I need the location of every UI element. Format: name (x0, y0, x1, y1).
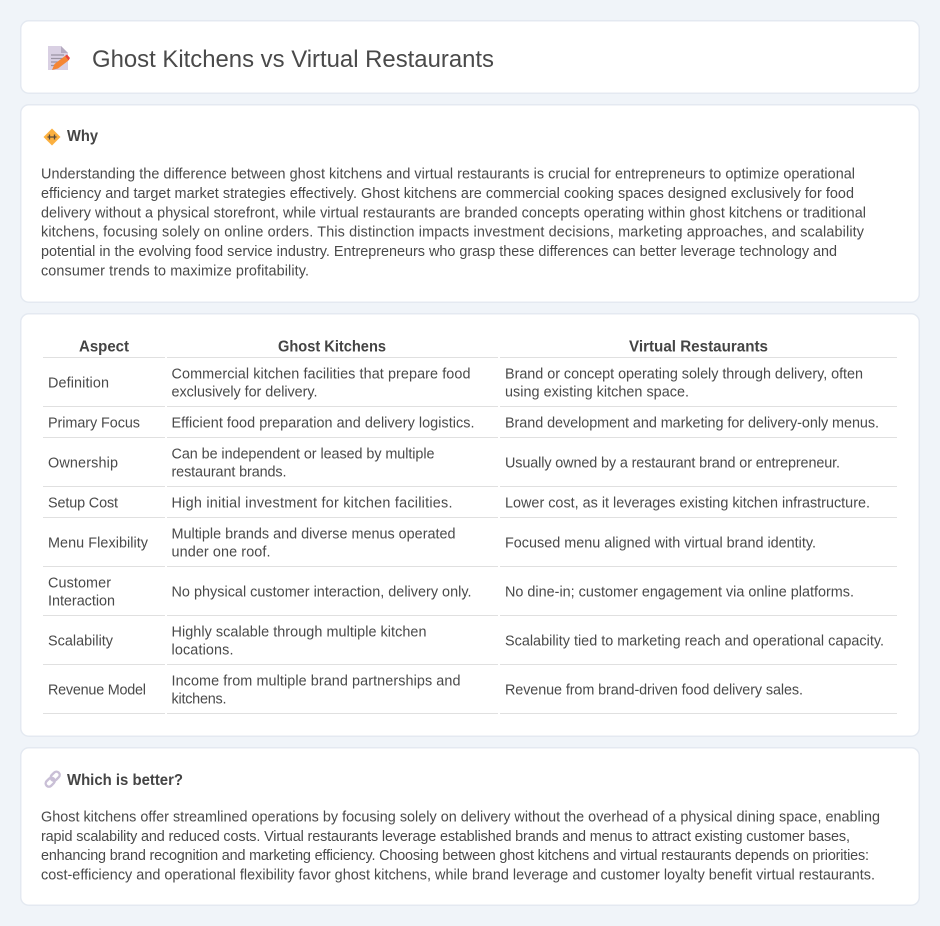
why paragraph: potential in the evolving food service industry. Entrepreneurs who grasp these differences can better leverage technology and (41, 244, 837, 260)
row: definition: Brand or concept operating solely through delivery, often (505, 366, 863, 382)
row: scalability: locations. (172, 642, 234, 658)
row: definition: using existing kitchen space. (505, 384, 689, 400)
why paragraph: consumer trends to maximize profitability. (41, 264, 309, 280)
conclusion paragraph: enhancing brand recognition and marketing efficiency. Choosing between ghost kitchens and virtual restaurants depends on priorities: (41, 848, 869, 864)
row: menu flexibility: under one roof. (172, 544, 270, 560)
row: customer interaction: Customer (48, 576, 111, 592)
heading: which is better: Which is better? (67, 772, 183, 789)
icon: document with pencil (48, 46, 70, 70)
row: revenue model (48, 674, 803, 708)
panel: why (21, 105, 919, 302)
row: setup cost: Lower cost, as it leverages existing kitchen infrastructure. (505, 496, 870, 512)
row: customer interaction: No dine-in; customer engagement via online platforms. (505, 584, 854, 600)
row: primary focus: Primary Focus (48, 416, 140, 432)
row: menu flexibility: Menu Flexibility (48, 536, 149, 552)
row: customer interaction: Interaction (48, 594, 115, 610)
row: definition: exclusively for delivery. (172, 384, 318, 400)
row: primary focus: Brand development and marketing for delivery-only menus. (505, 416, 879, 432)
row: setup cost (48, 496, 870, 512)
row: menu flexibility: Multiple brands and diverse menus operated (172, 526, 456, 542)
row: definition: Commercial kitchen facilities that prepare food (172, 366, 470, 382)
row: setup cost: Setup Cost (48, 496, 118, 512)
row: menu flexibility: Focused menu aligned with virtual brand identity. (505, 536, 816, 552)
why paragraph: delivery without a physical storefront, while virtual restaurants are branded concepts operating within ghost kitchens or traditional (41, 206, 866, 222)
row: ownership: Usually owned by a restaurant brand or entrepreneur. (505, 456, 840, 472)
row: customer interaction: No physical customer interaction, delivery only. (172, 584, 472, 600)
why paragraph: efficiency and target market strategies effectively. Ghost kitchens are commercial cooking spaces designed exclusively for food (41, 186, 854, 202)
table header: Aspect (79, 338, 129, 356)
row: scalability: Scalability tied to marketing reach and operational capacity. (505, 634, 884, 650)
conclusion paragraph: Ghost kitchens offer streamlined operations by focusing solely on delivery without the overhead of a physical dining space, enabling (41, 810, 880, 826)
table header: Virtual Restaurants (629, 338, 768, 356)
icon: warning diamond (44, 128, 60, 146)
row: primary focus (48, 416, 879, 432)
row: revenue model: Revenue Model (48, 682, 146, 698)
row: revenue model: Revenue from brand-driven food delivery sales. (505, 682, 803, 698)
row: customer interaction (48, 576, 854, 610)
why paragraph: kitchens, focusing solely on online orders. This distinction impacts investment decisions, marketing approaches, and scalability (41, 224, 865, 240)
row: definition: Definition (48, 376, 109, 392)
icon: link (44, 770, 61, 788)
row: revenue model: kitchens. (172, 692, 226, 708)
panel: which is better (21, 748, 919, 905)
row: setup cost: High initial investment for kitchen facilities. (172, 496, 452, 512)
panel: comparison table (21, 314, 919, 736)
table header: Ghost Kitchens (278, 338, 386, 356)
heading: why: Why (67, 128, 98, 145)
row: ownership (48, 446, 840, 480)
row: menu flexibility (48, 526, 816, 560)
conclusion paragraph: cost-efficiency and operational flexibility favor ghost kitchens, while brand leverage and customer loyalty benefit virtual restaurants. (41, 868, 875, 884)
row: ownership: restaurant brands. (172, 464, 286, 480)
row: revenue model: Income from multiple brand partnerships and (172, 674, 460, 690)
row: ownership: Can be independent or leased by multiple (172, 446, 434, 462)
row: definition (48, 366, 863, 400)
table header (79, 338, 768, 356)
row: scalability: Scalability (48, 634, 114, 650)
conclusion paragraph (41, 810, 880, 884)
row: primary focus: Efficient food preparation and delivery logistics. (172, 416, 474, 432)
row: ownership: Ownership (48, 456, 118, 472)
title: Ghost Kitchens vs Virtual Restaurants (92, 46, 494, 73)
why paragraph: Understanding the difference between ghost kitchens and virtual restaurants is crucial for entrepreneurs to optimize operational (41, 166, 855, 182)
row: scalability (48, 624, 884, 658)
header card (21, 21, 919, 93)
why paragraph (41, 166, 866, 280)
row: scalability: Highly scalable through multiple kitchen (172, 624, 426, 640)
conclusion paragraph: rapid scalability and reduced costs. Virtual restaurants leverage established brands and menus to attract existing customer bases, (41, 829, 850, 845)
